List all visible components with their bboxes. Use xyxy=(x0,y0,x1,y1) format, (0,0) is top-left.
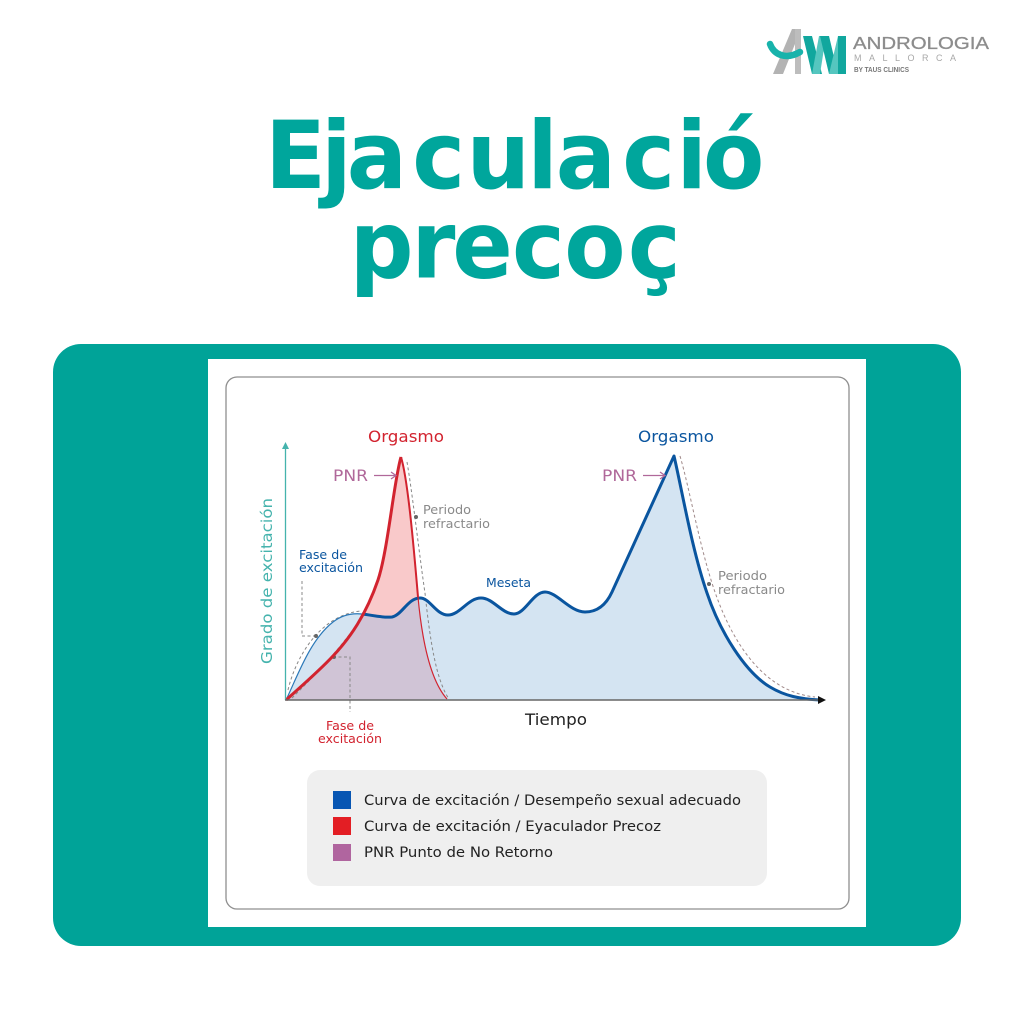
blue area xyxy=(286,456,820,700)
blue excitation phase label: Fase de xyxy=(299,548,347,562)
PNR early arrow: PNR xyxy=(333,466,368,485)
dot markers xyxy=(314,515,711,659)
refractory label late: refractario xyxy=(718,582,785,597)
refractory label early xyxy=(423,502,490,531)
legend xyxy=(307,770,767,886)
y axis label: Grado de excitación xyxy=(258,498,276,664)
logo: Andrologia Mallorca: ANDROLOGIA xyxy=(853,33,989,53)
chart: excitation curves xyxy=(258,427,826,746)
red area xyxy=(286,457,447,700)
PNR early arrow xyxy=(333,466,396,485)
logo: Andrologia Mallorca: BY TAUS CLINICS xyxy=(854,67,909,74)
blue excitation phase label xyxy=(299,548,363,575)
refractory label early: Periodo xyxy=(423,502,471,517)
refractory label late xyxy=(718,568,785,597)
dashed reference curves xyxy=(288,456,815,712)
red orgasm label: Orgasmo xyxy=(368,427,444,446)
title: Ejaculació xyxy=(265,101,764,211)
title: precoç xyxy=(350,190,681,300)
plateau label: Meseta xyxy=(486,576,531,590)
thin blue curve, early section xyxy=(286,614,362,700)
panel: white chart card xyxy=(208,359,866,927)
red excitation phase label: Fase de xyxy=(326,719,374,733)
blue curve xyxy=(362,456,820,700)
logo: Andrologia Mallorca xyxy=(770,29,989,74)
red excitation phase label: excitación xyxy=(318,732,382,746)
legend: adequate performance: Curva de excitación / Desempeño sexual adecuado xyxy=(364,793,741,809)
blue orgasm label: Orgasmo xyxy=(638,427,714,446)
axes xyxy=(282,442,826,704)
legend: premature ejaculator: Curva de excitación / Eyaculador Precoz xyxy=(364,819,661,835)
PNR late arrow xyxy=(602,466,665,485)
red curve xyxy=(286,457,401,700)
title xyxy=(265,101,764,300)
overlap area xyxy=(286,598,447,700)
red excitation phase label xyxy=(318,719,382,746)
legend: point of no return: PNR Punto de No Retorno xyxy=(364,845,553,861)
x axis label: Tiempo xyxy=(524,710,587,729)
refractory label late: Periodo xyxy=(718,568,767,583)
refractory label early: refractario xyxy=(423,516,490,531)
PNR late arrow: PNR xyxy=(602,466,637,485)
blue excitation phase label: excitación xyxy=(299,561,363,575)
logo: Andrologia Mallorca: MALLORCA xyxy=(854,53,956,63)
panel: teal background xyxy=(53,344,961,946)
